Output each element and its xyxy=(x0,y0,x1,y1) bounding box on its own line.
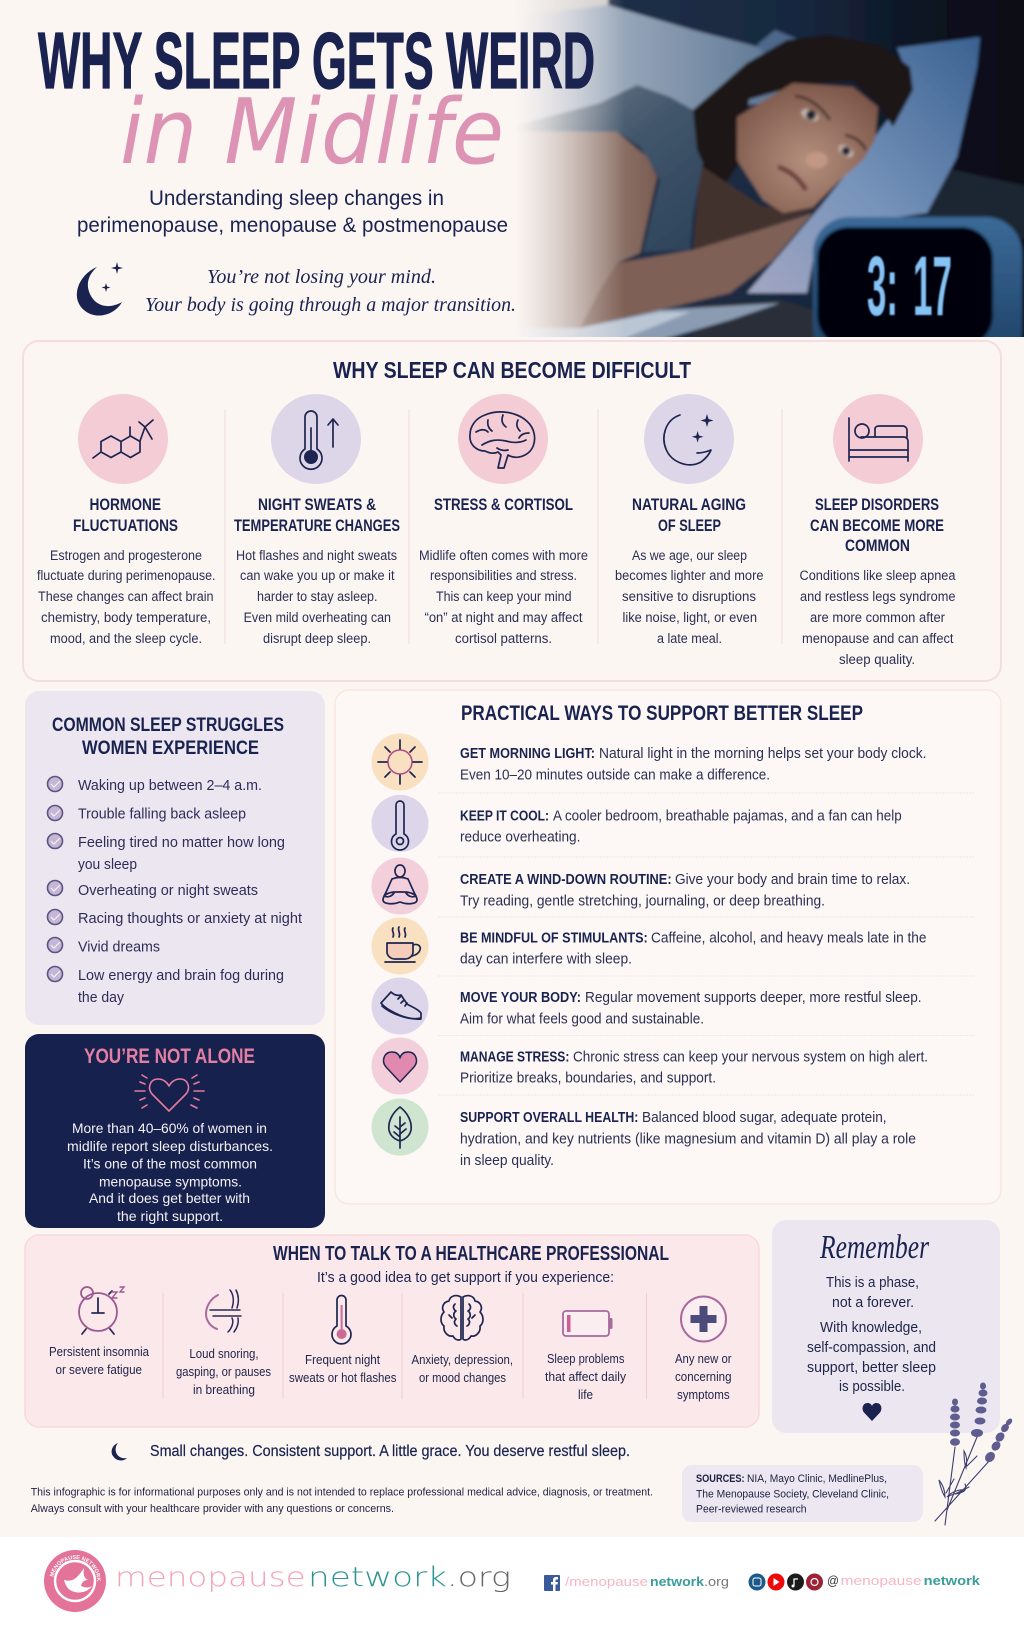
item: insomnia: or severe fatigue xyxy=(56,1363,142,1377)
script heading: Remember xyxy=(819,1229,930,1266)
tagline quote: You’re not losing your mind. xyxy=(207,266,436,288)
struggles list: Low energy and brain fog during xyxy=(78,967,284,984)
struggles list: you sleep xyxy=(78,856,137,873)
column: stress and cortisol: cortisol patterns. xyxy=(455,631,552,646)
row: keep it cool: A cooler bedroom, breathable pajamas, and a fan can help xyxy=(553,808,902,824)
column: hormone fluctuations: fluctuate during perimenopause. xyxy=(37,568,216,583)
item: anxiety: or mood changes xyxy=(419,1371,506,1385)
column: stress and cortisol: STRESS & CORTISOL xyxy=(434,496,573,514)
dividers xyxy=(163,1293,647,1399)
column: night sweats: NIGHT SWEATS & xyxy=(258,496,376,514)
heading: YOU’RE NOT ALONE xyxy=(84,1045,255,1068)
tagline quote xyxy=(145,266,516,316)
sources box xyxy=(682,1465,923,1522)
row: keep it cool: reduce overheating. xyxy=(460,829,580,845)
struggles list: Waking up between 2–4 a.m. xyxy=(78,777,262,794)
row: morning light: GET MORNING LIGHT: xyxy=(460,746,595,762)
column: sleep disorders: CAN BECOME MORE xyxy=(810,517,944,535)
illustration: lavender sprigs xyxy=(935,1382,1013,1525)
column: hormone fluctuations: Estrogen and progesterone xyxy=(50,548,202,563)
row: support overall health: hydration, and key nutrients (like magnesium and vitamin D) all play a role xyxy=(460,1131,916,1147)
row: keep it cool xyxy=(372,795,902,852)
column: stress and cortisol: Midlife often comes with more xyxy=(419,548,588,563)
row: stimulants: day can interfere with sleep. xyxy=(460,951,632,967)
row: support overall health: in sleep quality. xyxy=(460,1153,554,1169)
tagline quote: Your body is going through a major transition. xyxy=(145,294,516,316)
social handle: menopause xyxy=(841,1573,922,1588)
closing message: Small changes. Consistent support. A little grace. You deserve restful sleep. xyxy=(150,1443,630,1460)
struggles list: Vivid dreams xyxy=(78,938,160,956)
heading: WOMEN EXPERIENCE xyxy=(82,738,259,759)
icon: brain xyxy=(458,394,548,484)
row: manage stress: Prioritize breaks, boundaries, and support. xyxy=(460,1070,716,1086)
subtitle xyxy=(77,187,508,237)
column: natural aging of sleep: OF SLEEP xyxy=(658,517,721,535)
sources box: SOURCES: xyxy=(696,1473,745,1485)
reassurance text: not a forever. xyxy=(832,1295,914,1311)
icon: plus in circle xyxy=(681,1296,726,1342)
heading: WHEN TO TALK TO A HEALTHCARE PROFESSIONAL xyxy=(273,1243,669,1265)
item: daily life problems: life xyxy=(578,1388,593,1402)
icon: snoring sound waves xyxy=(206,1290,241,1332)
item: daily life problems: that affect daily xyxy=(545,1370,627,1384)
item: new symptoms: symptoms xyxy=(677,1388,730,1402)
column: night sweats: disrupt deep sleep. xyxy=(263,631,371,646)
icon: small moon xyxy=(112,1443,127,1460)
wordmark xyxy=(115,1562,511,1593)
item: snoring: gasping, or pauses xyxy=(176,1365,271,1379)
icon: moon and stars xyxy=(644,394,734,484)
column: natural aging of sleep xyxy=(615,394,764,646)
column: sleep disorders: and restless legs syndrome xyxy=(800,589,956,604)
icon: meditating person xyxy=(372,858,428,914)
facebook handle: /menopause xyxy=(565,1575,648,1589)
icon: brain xyxy=(441,1296,483,1340)
item: anxiety xyxy=(412,1296,513,1385)
row: manage stress: MANAGE STRESS: xyxy=(460,1049,569,1065)
item: daily life problems xyxy=(545,1311,627,1402)
icon: hormone molecule xyxy=(78,394,168,484)
row: stimulants: BE MINDFUL OF STIMULANTS: xyxy=(460,930,648,946)
title xyxy=(38,16,595,185)
wordmark: .org xyxy=(447,1562,511,1593)
column: night sweats: harder to stay asleep. xyxy=(257,589,378,604)
social handle xyxy=(827,1573,981,1588)
dividers xyxy=(225,409,782,644)
column: sleep disorders: Conditions like sleep apnea xyxy=(800,568,956,583)
column: night sweats: Hot flashes and night sweats xyxy=(236,548,397,563)
facebook handle: .org xyxy=(704,1575,729,1589)
reassurance text: With knowledge, xyxy=(820,1320,922,1336)
row: stimulants: Caffeine, alcohol, and heavy meals late in the xyxy=(651,930,926,946)
column: sleep disorders: are more common after xyxy=(810,610,945,625)
row: morning light xyxy=(372,734,926,790)
icon: heart xyxy=(372,1038,428,1094)
icon: thermometer xyxy=(332,1296,351,1344)
row: keep it cool: KEEP IT COOL: xyxy=(460,808,549,824)
item: night sweats xyxy=(289,1296,396,1385)
row: wind-down routine xyxy=(372,858,910,914)
sources box: Peer-reviewed research xyxy=(696,1504,807,1516)
logo badge xyxy=(44,1550,106,1612)
item: snoring: Loud snoring, xyxy=(189,1347,259,1361)
icon: sun xyxy=(372,734,428,790)
panel: practical ways to support better sleep xyxy=(335,690,1001,1204)
panel: when to talk to a healthcare professional xyxy=(25,1235,759,1427)
social handle: @ xyxy=(827,1573,839,1588)
row: morning light: Natural light in the morning helps set your body clock. xyxy=(599,746,926,762)
column: natural aging of sleep: As we age, our sleep xyxy=(632,548,747,563)
item: insomnia xyxy=(49,1287,149,1377)
reassurance text: support, better sleep xyxy=(807,1360,936,1376)
statistic text: the right support. xyxy=(117,1208,223,1224)
heading: PRACTICAL WAYS TO SUPPORT BETTER SLEEP xyxy=(461,702,863,725)
item: insomnia: Persistent insomnia xyxy=(49,1345,149,1359)
row: move your body xyxy=(372,978,922,1034)
subtitle: perimenopause, menopause & postmenopause xyxy=(77,214,508,237)
clock digits: 3: xyxy=(867,239,898,333)
reassurance text: is possible. xyxy=(839,1379,905,1395)
footer xyxy=(0,1537,1024,1630)
panel: you're not alone xyxy=(25,1034,325,1228)
disclaimer: This infographic is for informational purposes only and is not intended to replace professional medical advice, diagnosis, or treatment. xyxy=(31,1487,653,1499)
column: hormone fluctuations: These changes can affect brain xyxy=(38,589,214,604)
clock digits xyxy=(866,255,952,317)
column: hormone fluctuations: mood, and the sleep cycle. xyxy=(50,631,202,646)
struggles list: Racing thoughts or anxiety at night xyxy=(78,910,303,927)
row: wind-down routine: Give your body and brain time to relax. xyxy=(675,872,910,888)
disclaimer: Always consult with your healthcare provider with any questions or concerns. xyxy=(31,1503,394,1515)
reassurance text: This is a phase, xyxy=(826,1275,919,1291)
column: stress and cortisol: This can keep your mind xyxy=(436,589,572,604)
title script line: in Midlife xyxy=(120,80,504,185)
column: sleep disorders: SLEEP DISORDERS xyxy=(815,496,939,514)
item: daily life problems: Sleep problems xyxy=(547,1352,624,1366)
column: sleep disorders: sleep quality. xyxy=(839,652,915,667)
column: hormone fluctuations: HORMONE xyxy=(90,496,161,514)
heading: COMMON SLEEP STRUGGLES xyxy=(52,715,284,736)
icon: alarm clock with zzz xyxy=(79,1287,124,1334)
row: stimulants xyxy=(372,918,926,974)
struggles list: Overheating or night sweats xyxy=(78,882,258,899)
row: move your body: MOVE YOUR BODY: xyxy=(460,990,581,1006)
reassurance text xyxy=(807,1275,936,1395)
title line 1: WHY SLEEP GETS WEIRD xyxy=(38,16,595,105)
facebook handle xyxy=(565,1575,729,1589)
item: new symptoms: Any new or xyxy=(675,1352,732,1366)
column: sleep disorders: menopause and can affect xyxy=(802,631,954,646)
icon: running shoe xyxy=(372,978,428,1034)
icon: bed xyxy=(833,394,923,484)
row: support overall health xyxy=(372,1098,916,1169)
statistic text: And it does get better with xyxy=(89,1190,250,1206)
row: morning light: Even 10–20 minutes outside can make a difference. xyxy=(460,767,770,783)
column: hormone fluctuations: FLUCTUATIONS xyxy=(73,517,178,535)
row dividers xyxy=(438,793,974,1095)
statistic text: It’s one of the most common xyxy=(83,1156,257,1172)
column: stress and cortisol: responsibilities and stress. xyxy=(430,568,577,583)
column: night sweats: TEMPERATURE CHANGES xyxy=(234,517,400,535)
column: natural aging of sleep: sensitive to disruptions xyxy=(622,589,756,604)
row: manage stress: Chronic stress can keep your nervous system on high alert. xyxy=(573,1049,928,1065)
item: new symptoms: concerning xyxy=(675,1370,732,1384)
heading xyxy=(52,715,284,759)
panel: remember xyxy=(772,1220,1000,1433)
column: sleep disorders xyxy=(800,394,956,667)
icon: facebook xyxy=(544,1575,560,1591)
column: sleep disorders: COMMON xyxy=(845,537,910,555)
icon: thermometer with up arrow xyxy=(271,394,361,484)
struggles list: Feeling tired no matter how long xyxy=(78,834,285,851)
column: stress and cortisol: “on” at night and may affect xyxy=(424,610,583,625)
social handle: network xyxy=(924,1573,981,1588)
icon: radiating heart xyxy=(135,1075,204,1111)
column: natural aging of sleep: a late meal. xyxy=(657,631,722,646)
icon: low battery xyxy=(563,1311,612,1336)
sources box: The Menopause Society, Cleveland Clinic, xyxy=(696,1489,889,1501)
heading: WHY SLEEP CAN BECOME DIFFICULT xyxy=(333,357,691,383)
row: move your body: Aim for what feels good and sustainable. xyxy=(460,1011,704,1027)
statistic text: menopause symptoms. xyxy=(99,1173,242,1189)
icon: heart xyxy=(863,1403,881,1421)
row: manage stress xyxy=(372,1038,928,1094)
struggles list: Trouble falling back asleep xyxy=(78,806,246,822)
row: support overall health: SUPPORT OVERALL HEALTH: xyxy=(460,1110,638,1126)
facebook handle: network xyxy=(650,1575,704,1589)
column: stress and cortisol xyxy=(419,394,588,646)
row: wind-down routine: CREATE A WIND-DOWN ROUTINE: xyxy=(460,872,672,888)
column: night sweats: can wake you up or make it xyxy=(240,568,395,583)
column: night sweats: Even mild overheating can xyxy=(244,610,391,625)
struggles list: the day xyxy=(78,989,124,1006)
column: natural aging of sleep: like noise, light, or even xyxy=(622,610,757,625)
column: natural aging of sleep: becomes lighter and more xyxy=(615,568,764,583)
item: new symptoms xyxy=(675,1296,732,1402)
wordmark: menopause xyxy=(115,1562,306,1593)
disclaimer xyxy=(31,1487,653,1515)
icons: social networks xyxy=(748,1574,823,1590)
row: move your body: Regular movement supports deeper, more restful sleep. xyxy=(585,990,922,1006)
subtitle: Understanding sleep changes in xyxy=(149,187,444,210)
row: support overall health: Balanced blood sugar, adequate protein, xyxy=(642,1110,887,1126)
row: wind-down routine: Try reading, gentle stretching, journaling, or deep breathing. xyxy=(460,894,825,910)
icon: thermometer xyxy=(372,795,428,852)
check bullets xyxy=(48,776,62,982)
item: snoring: in breathing xyxy=(193,1383,255,1397)
column: night sweats xyxy=(234,394,400,646)
item: snoring xyxy=(176,1290,271,1397)
item: night sweats: sweats or hot flashes xyxy=(289,1371,396,1385)
reassurance text: self-compassion, and xyxy=(807,1340,936,1356)
subheading: It’s a good idea to get support if you experience: xyxy=(317,1269,614,1286)
icon: crescent moon with stars xyxy=(77,262,123,316)
sources box: NIA, Mayo Clinic, MedlinePlus, xyxy=(747,1473,887,1485)
statistic text xyxy=(67,1120,273,1224)
column: hormone fluctuations xyxy=(37,394,216,646)
photo: woman awake in bed with alarm clock xyxy=(521,0,1024,337)
struggles list xyxy=(78,777,303,1006)
logo badge: MENOPAUSE NETWORK xyxy=(50,1555,101,1582)
item: anxiety: Anxiety, depression, xyxy=(412,1353,513,1367)
icon: coffee cup xyxy=(372,918,428,974)
panel: common sleep struggles xyxy=(25,691,325,1025)
wordmark: network xyxy=(308,1562,447,1593)
icon: leaf xyxy=(372,1098,428,1156)
column: hormone fluctuations: chemistry, body temperature, xyxy=(41,610,211,625)
column: natural aging of sleep: NATURAL AGING xyxy=(632,496,746,514)
item: night sweats: Frequent night xyxy=(305,1353,380,1367)
panel: why sleep can become difficult xyxy=(23,341,1001,681)
statistic text: More than 40–60% of women in xyxy=(72,1120,267,1136)
photo: woman awake in bed with alarm clock: 17 xyxy=(913,239,952,333)
statistic text: midlife report sleep disturbances. xyxy=(67,1138,273,1154)
